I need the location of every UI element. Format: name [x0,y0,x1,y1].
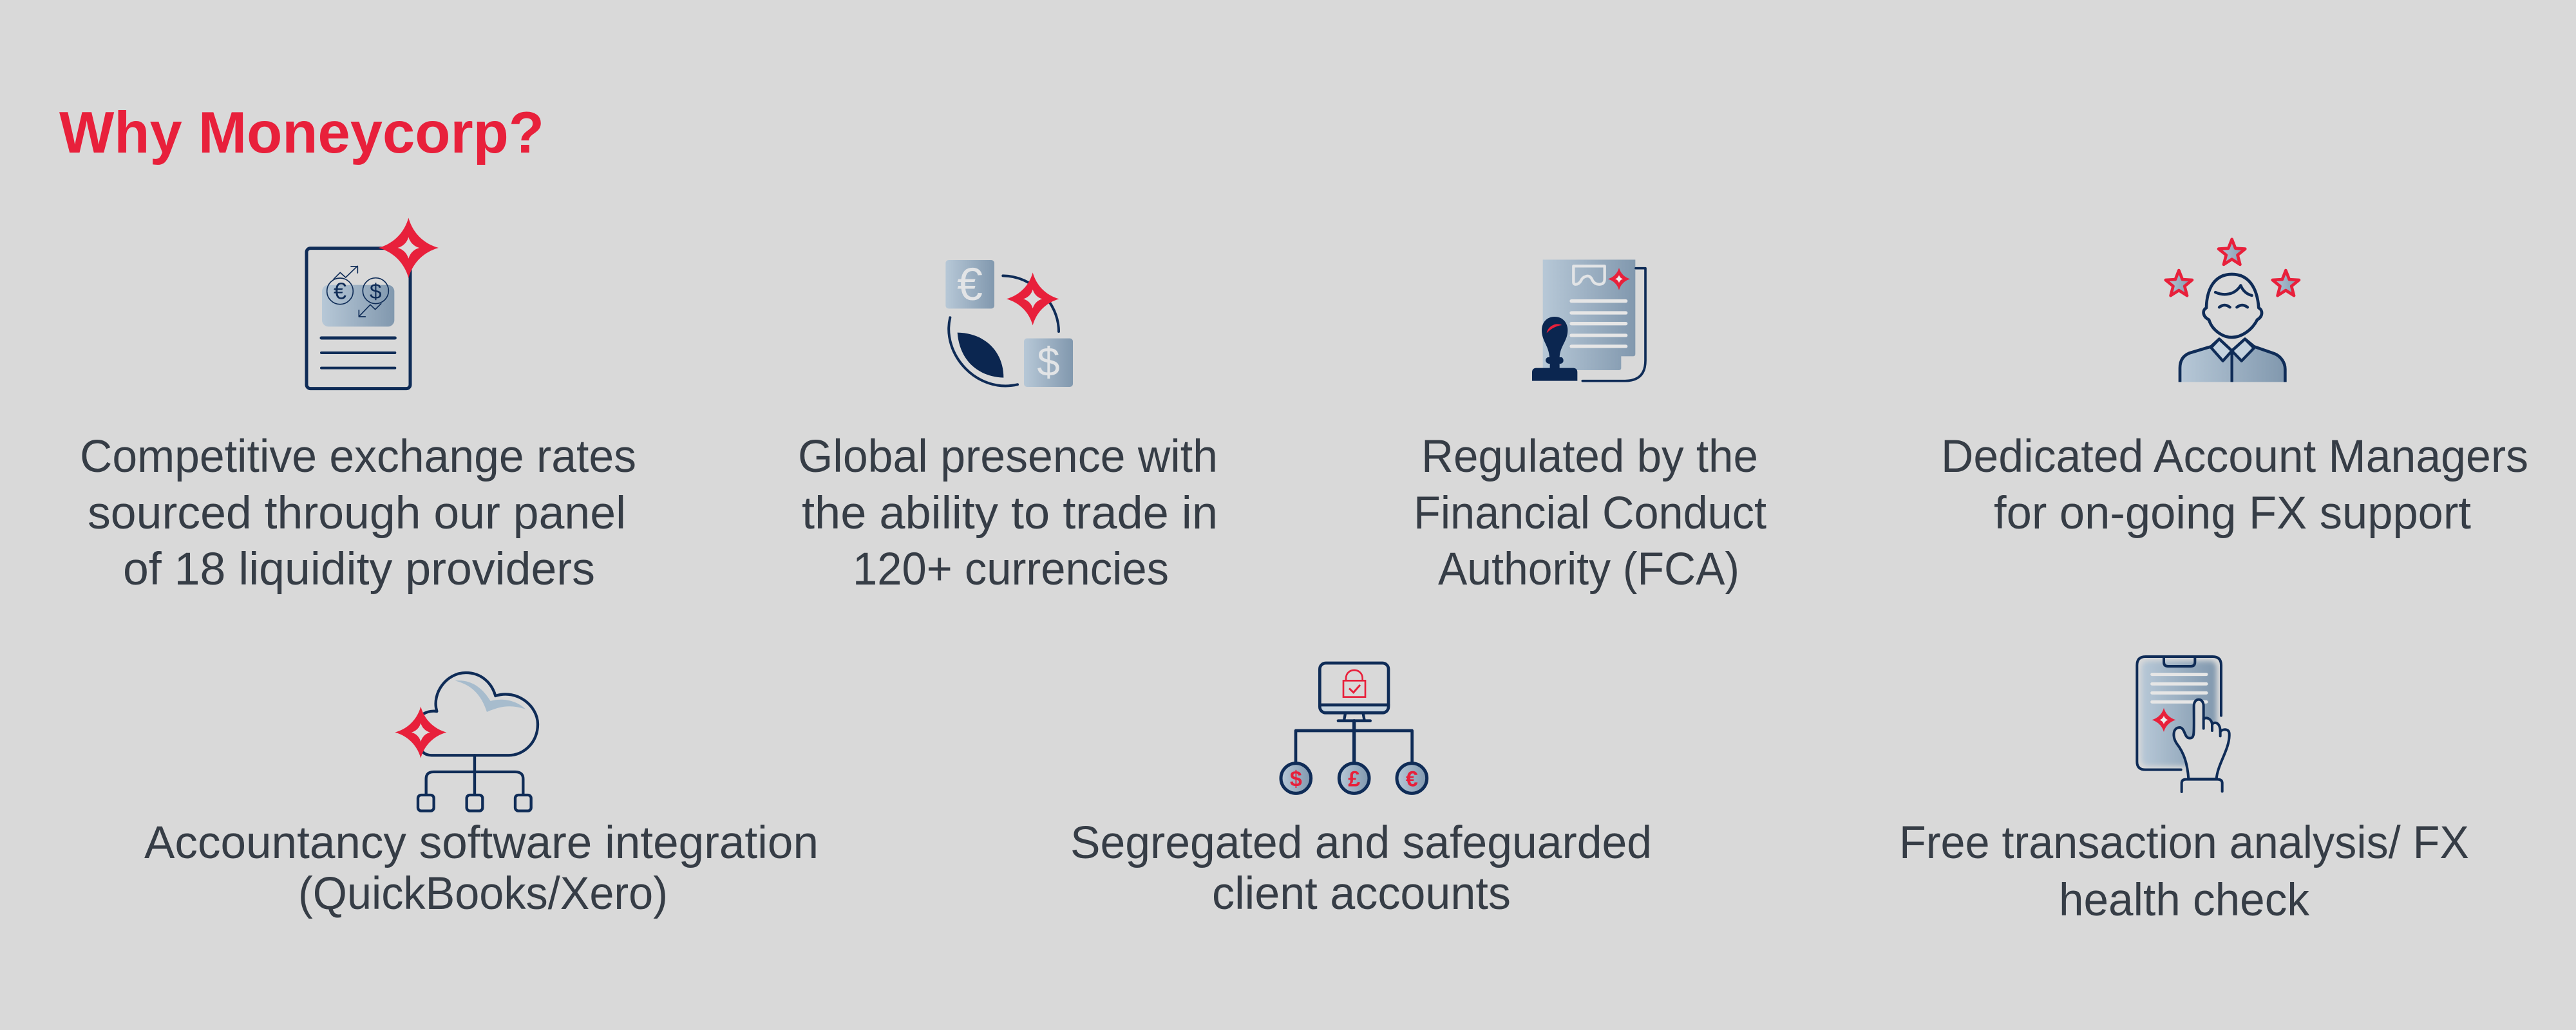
caption: accountancy software integration: (QuickBooks/Xero) [298,868,668,919]
caption: free transaction analysis [1899,818,2469,926]
panel: competitive exchange rates [80,218,636,595]
caption: competitive exchange rates: Competitive exchange rates [80,431,636,482]
icon: secure monitor linked to currencies: € [1406,767,1418,791]
icon: currency exchange cycle with leaf: $ [1037,340,1060,385]
caption: regulated by the FCA: Regulated by the [1421,431,1758,482]
icon: rate document with sparkle: € [334,278,346,304]
caption: competitive exchange rates: of 18 liquidity providers [123,544,595,595]
icon: manager with three stars [2166,239,2299,382]
icon: currency exchange cycle with leaf [945,259,1073,387]
caption: dedicated account managers [1941,431,2528,539]
caption: free transaction analysis: Free transaction analysis/ FX [1899,818,2469,868]
icon: stamped certificate [1532,259,1645,381]
icon: currency exchange cycle with leaf: € [957,259,983,310]
caption: regulated by the FCA: Authority (FCA) [1438,544,1739,595]
caption: accountancy software integration [144,818,819,919]
icon: secure monitor linked to currencies: £ [1348,767,1360,791]
icon: tablet with tapping hand [2137,657,2230,792]
caption: free transaction analysis: health check [2059,875,2309,926]
caption: accountancy software integration: Accountancy software integration [144,818,819,868]
icon: cloud network [395,673,538,811]
caption: regulated by the FCA: Financial Conduct [1414,488,1766,539]
panel: dedicated account managers [1941,239,2528,539]
icon: secure monitor linked to currencies: $ [1290,767,1302,791]
panel: accountancy software integration [144,673,819,919]
panel: free transaction analysis [1899,657,2469,926]
caption: competitive exchange rates: sourced through our panel [88,488,626,539]
caption: segregated client accounts: client accounts [1212,868,1511,919]
caption: global presence [798,431,1218,595]
icon: secure monitor linked to currencies [1281,663,1427,793]
panel: segregated client accounts [1070,663,1652,919]
panel: global presence [798,259,1218,595]
caption: segregated client accounts [1070,818,1652,919]
icon: rate document with sparkle: $ [370,280,382,304]
caption: dedicated account managers: Dedicated Account Managers [1941,431,2528,482]
caption: competitive exchange rates [80,431,636,595]
caption: global presence: 120+ currencies [853,544,1169,595]
caption: dedicated account managers: for on-going FX support [1994,488,2471,539]
icon: rate document with sparkle [307,218,439,389]
panel: regulated by the FCA [1414,259,1766,595]
caption: global presence: the ability to trade in [802,488,1218,539]
title: Why Moneycorp? [59,100,544,165]
caption: regulated by the FCA [1414,431,1766,595]
caption: segregated client accounts: Segregated and safeguarded [1070,818,1652,868]
caption: global presence: Global presence with [798,431,1218,482]
